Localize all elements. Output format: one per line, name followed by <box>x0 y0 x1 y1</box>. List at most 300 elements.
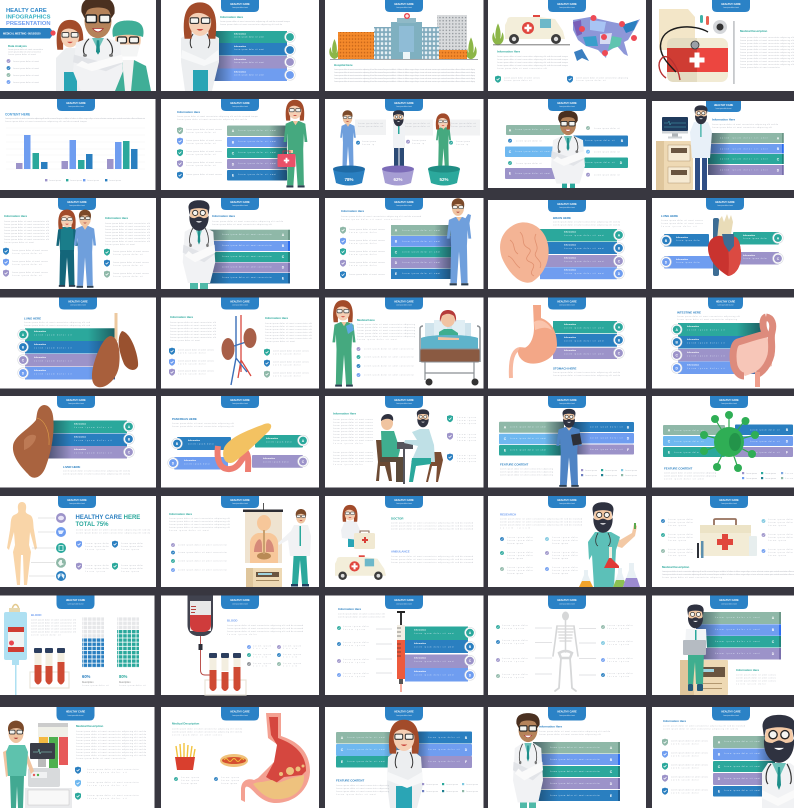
list items <box>171 543 227 572</box>
lettered bars: Lorem ipsum dolor sit amet <box>724 740 761 743</box>
lettered bars: B <box>395 240 398 244</box>
list items: Lorem ipsum dolor <box>507 566 533 569</box>
right bars: Lorem ipsum dolor sit <box>428 736 461 739</box>
text block: Lorem ipsum dolor sit amet consectetur adipiscing elit sed do <box>663 728 738 730</box>
list items: Lorem ipsum <box>283 662 301 665</box>
header tab <box>548 298 586 310</box>
podium: 78 percent: 78% <box>344 177 354 182</box>
panel: intestine <box>652 298 794 388</box>
left bars: Lorem ipsum dolor sit amet <box>515 128 551 131</box>
text block: right: Lorem ipsum dolor sit amet consectetur elit <box>105 228 150 231</box>
list items: Lorem ipsum dolor <box>552 566 578 569</box>
text block: Lorem ipsum <box>500 526 530 530</box>
illustration: anatomy chart <box>243 503 283 563</box>
list items: Lorem ipsum <box>552 557 568 560</box>
heading: right: Information Here <box>105 216 129 220</box>
list items: Lorem ipsum dolor sit amet consectetur <box>178 560 227 562</box>
check list: Lorem ipsum <box>457 433 476 436</box>
illustration: hospital building <box>329 13 478 60</box>
right bars: B <box>465 736 468 740</box>
text block: Lorem ipsum dolor sit amet consectetur adipiscing elit sed do <box>212 220 283 223</box>
illustration: patient in bed <box>420 310 480 386</box>
right bars: Lorem ipsum dolor sit <box>590 426 624 428</box>
panel: research <box>488 496 646 587</box>
info bars: D <box>618 272 621 276</box>
panel: stomach with bars <box>488 298 646 388</box>
lettered bars: Lorem ipsum dolor sit amet <box>402 261 441 264</box>
header tab <box>710 596 748 609</box>
text block: right: Lorem ipsum dolor sit amet consectetur elit <box>265 322 312 325</box>
text block <box>334 68 475 83</box>
header tab: Lorem ipsum dolor sit amet <box>723 6 739 9</box>
panel: medical machine <box>0 707 154 808</box>
text block: Lorem ipsum dolor sit amet consectetur elit <box>497 67 547 70</box>
panel: female doctor with six bars <box>325 707 484 808</box>
text block: Lorem ipsum dolor sit amet consectetur adipiscing elit sed do eiusmod tempor incididunt ut labore et dolore magna aliqua ut enim ad minim veniam quis nostrud exercitation ullamco laboris nisi ut aliquip <box>334 77 475 80</box>
list items: Lorem ipsum dolor <box>552 551 578 554</box>
check list: Lorem ipsum dolor <box>671 778 699 782</box>
header tab: HEALTHY CARE <box>66 399 86 402</box>
info bars: Information <box>184 459 197 462</box>
text block: Lorem ipsum dolor sit amet consec <box>736 674 776 676</box>
list items: Lorem ipsum dolor <box>507 554 533 557</box>
right bars: F <box>465 760 467 764</box>
check items: Lorem ip <box>412 142 424 145</box>
callout boxes: Lorem ipsum dolor sit <box>451 125 476 128</box>
text block <box>76 730 146 760</box>
info bars: Lorem ipsum dolor sit amet <box>564 234 605 237</box>
text block <box>172 728 242 736</box>
lettered bars: Lorem ipsum dolor sit amet <box>720 168 769 172</box>
text block: left: Lorem ipsum dolor sit amet consectetur elit <box>4 238 49 241</box>
right bars: B <box>621 139 624 143</box>
check list: Lorem ipsum dolor sit amet consec <box>671 752 708 754</box>
header tab: Lorem ipsum dolor sit amet <box>68 402 84 405</box>
header tab: Lorem ipsum dolor sit amet <box>232 502 248 505</box>
left bars: C <box>504 437 507 441</box>
list items with arrows: Lorem ipsum dolor <box>343 672 369 675</box>
text block: Lorem ipsum dolor sit amet consectetur adipiscing elit sed do eiusmod <box>227 627 303 630</box>
check list: left: Lorem ipsum dolor sit amet consec <box>178 348 214 352</box>
text block: Lorem ipsum dolor sit amet consectetur adipiscing elit <box>169 526 230 529</box>
text block: Lorem ipsum dolor sit amet consectetur adipiscing elit sed do eiusmod tempor <box>220 20 290 23</box>
lettered bars: C <box>282 255 285 259</box>
text block: Lorem ipsum dolor sit amet consectetur adipiscing elit sed do eiusmod tempor <box>177 115 258 118</box>
check items: Lorem ipsum <box>362 140 376 143</box>
pin items: Lorem ipsum <box>121 548 139 551</box>
text block: Lorem ipsum dolor sit amet consectetur adipiscing elit sed do <box>172 730 242 734</box>
info bars: A <box>777 236 780 240</box>
info bars: Information <box>414 642 427 645</box>
info bars: Information <box>74 436 87 438</box>
podium: 62 percent <box>382 166 414 186</box>
text block: Lorem ipsum dolor sit amet consec <box>736 680 776 682</box>
header tab: Lorem ipsum dolor sit amet <box>716 107 732 110</box>
lettered bars: Lorem ipsum dolor sit amet consectetur <box>550 770 600 773</box>
heading: LIVER HERE <box>63 465 80 469</box>
list items: Lorem ipsum <box>552 572 568 575</box>
panel: anatomy board and doctor <box>161 496 319 587</box>
info bars <box>553 321 624 359</box>
lettered bars <box>391 225 453 279</box>
lettered bars: E <box>718 790 721 794</box>
text block: Lorem ipsum dolor sit amet consec <box>333 460 373 463</box>
info bars: Information <box>687 364 700 366</box>
heading: Information Here <box>663 719 687 723</box>
info bars: Lorem ipsum dolor sit amet <box>564 247 605 250</box>
text block: right <box>265 322 312 343</box>
panel: skeleton <box>488 596 646 695</box>
lettered bars: B <box>282 244 285 248</box>
header tab: Lorem ipsum dolor sit amet <box>396 304 412 306</box>
info bars: Lorem ipsum dolor sit <box>34 360 73 362</box>
check list: left: Lorem ipsum dolor sit amet consec <box>178 370 214 372</box>
panel: doctor with six bars <box>488 396 646 488</box>
lettered bars: E <box>232 174 235 178</box>
text block: Lorem ipsum dolor sit amet consectetur adipiscing elit <box>740 60 794 63</box>
info bars: Lorem ipsum dolor sit <box>34 334 73 336</box>
legend: Lorem ipsum <box>426 790 438 793</box>
illustration: nurse <box>3 721 34 808</box>
text block: Lorem ipsum dolor sit amet consectetur adipiscing elit sed do <box>553 220 620 224</box>
pin items: Lorem ipsum dolor <box>85 545 109 548</box>
info bars: Information <box>564 268 577 272</box>
legend: Lorem ipsum <box>466 790 478 793</box>
header tab: HEALTHY CARE <box>394 499 414 502</box>
header tab: Lorem ipsum dolor sit amet <box>396 6 412 9</box>
check list: Lorem ipsum dolor sit amet consec <box>349 239 385 242</box>
text block <box>212 220 283 226</box>
header tab <box>385 198 423 210</box>
text block: Lorem ipsum dolor sit amet consectetur adipiscing elit sed do eiusmod tempor incididunt ut labore et dolore magna aliqua ut enim ad minim veniam quis nostrud exercitation ullamco laboris nisi ut aliquip <box>334 71 475 74</box>
lettered bars: A <box>718 740 721 744</box>
list items: Lorem ipsum <box>253 662 271 665</box>
illustration: skeleton <box>553 612 578 691</box>
lettered bars: A <box>610 746 613 750</box>
check list: right: Lorem ipsum dolor <box>273 374 301 378</box>
header tab: HEALTHY CARE <box>719 399 739 402</box>
header tab <box>56 707 94 720</box>
check list: right: Lorem ipsum dolor sit <box>113 275 143 278</box>
check list: Lorem ipsum dolor <box>671 766 699 770</box>
header tab: Lorem ipsum dolor sit amet <box>232 402 248 405</box>
lettered bars: B <box>718 752 721 756</box>
header tab: Lorem ipsum dolor sit amet <box>396 502 412 505</box>
check list: Lorem ipsum dolor sit amet consec <box>671 776 708 778</box>
illustration: ambulance <box>335 555 386 580</box>
text block: Lorem ipsum dolor sit amet consectetur elit <box>31 630 76 634</box>
text block: right: Lorem ipsum dolor sit amet consectetur elit <box>105 234 150 237</box>
list items with arrows: Lorem ipsum <box>343 644 365 647</box>
text block: Lorem ipsum dolor sit amet consectetur adipiscing elit sed do <box>553 371 620 374</box>
left bars: E <box>668 450 671 454</box>
list items: left: Lorem ipsum <box>668 539 686 542</box>
check list: Lorem ipsum dolor sit amet consec <box>349 261 385 264</box>
pin items: Lorem ipsum dolor <box>121 567 143 570</box>
text block <box>336 784 389 796</box>
legend: Lorem <box>785 472 793 475</box>
header tab <box>548 0 586 12</box>
title: PRESENTATION <box>6 21 51 27</box>
check items: Lorem ipsum dolor sit <box>516 140 542 142</box>
check list: Lorem ipsum dolor sit amet consectetur <box>364 374 414 376</box>
illustration: US map with pins <box>573 15 640 61</box>
info bars: Information <box>74 448 87 451</box>
info bars: Information <box>687 338 700 341</box>
list items: Lorem ipsum <box>507 572 523 575</box>
panel: blood bag and tubes <box>161 596 319 695</box>
text block: right: Lorem ipsum dolor sit amet consectetur elit <box>265 334 312 337</box>
list items: right: Lorem ipsum dolor <box>607 640 633 643</box>
illustration: body silhouette <box>7 502 37 585</box>
panel: virus <box>652 396 794 488</box>
header tab <box>221 396 259 408</box>
pin items <box>76 541 143 573</box>
header tab: HEALTHY CARE <box>721 710 741 714</box>
info bars: Information <box>676 236 689 239</box>
info bars: Information <box>564 336 577 339</box>
text block: Lorem ipsum dolor sit amet consectetur adipiscing elit <box>172 422 234 425</box>
text block: right: Lorem ipsum dolor sit amet <box>105 243 135 246</box>
text block: Lorem ipsum dolor sit <box>31 634 61 636</box>
text block: left: Lorem ipsum dolor sit amet consectetur elit <box>4 232 49 235</box>
legend: Lorem ipsum <box>765 472 776 475</box>
check list: Lorem ipsum dolor <box>349 253 377 256</box>
info bars: Lorem ipsum dolor sit <box>34 372 73 376</box>
header tab: Lorem ipsum dolor sit amet <box>396 602 412 606</box>
list items: right: Lorem ipsum dolor <box>607 672 633 675</box>
list items <box>500 536 578 575</box>
legend: Lorem ipsum <box>625 474 637 477</box>
right bars <box>735 424 793 457</box>
header tab: HEALTHY CARE <box>230 3 250 6</box>
info bars: A <box>618 233 621 237</box>
heading: ambulance: AMBULANCE <box>391 550 410 554</box>
info bars <box>405 626 475 682</box>
list items: Lorem ipsum dolor <box>552 554 578 557</box>
right bars: D <box>620 161 623 165</box>
waffle chart: 80 percent <box>117 617 139 667</box>
text block: Lorem ipsum dolor sit amet consectetur adipiscing elit sed do eiusmod tempor <box>497 55 568 58</box>
text block: ambulance: Lorem ipsum dolor sit amet consectetur adipiscing elit sed do eiusmod <box>391 561 473 564</box>
lettered bars: Lorem ipsum dolor sit amet <box>720 158 769 160</box>
check list: left: Lorem ipsum dolor sit amet consec <box>178 360 214 362</box>
left bars <box>505 125 564 179</box>
text block: Lorem ipsum dolor sit amet consectetur adipiscing elit <box>212 223 272 226</box>
header tab <box>706 198 744 210</box>
lettered bars: Lorem ipsum dolor sit amet <box>402 229 441 232</box>
lettered bars: Lorem ipsum dolor sit amet <box>402 250 441 254</box>
info bars: D <box>22 371 25 375</box>
check list: left: Lorem ipsum dolor sit <box>12 263 42 266</box>
illustration: stomach <box>511 305 557 378</box>
left bars: Lorem ipsum dolor sit amet <box>510 448 547 452</box>
lettered bars: Lorem ipsum dolor sit amet <box>238 162 277 165</box>
check items: Lorem ip <box>362 143 374 146</box>
header tab: HEALTHY CARE <box>557 399 577 402</box>
check list: Lorem ipsum dolor <box>349 264 377 267</box>
header tab: Lorem ipsum dolor sit amet <box>717 204 733 207</box>
lettered bars: Lorem ipsum dolor sit amet <box>724 765 761 768</box>
title: INFOGRAPHICS <box>6 14 51 20</box>
text block: Lorem ipsum dolor sit amet consectetur adipiscing elit sed do <box>76 751 146 754</box>
lettered bars: D <box>610 782 613 786</box>
illustration: machine <box>246 568 282 587</box>
text block: left: Lorem ipsum dolor sit amet consectetur elit <box>4 220 49 223</box>
header tab: Lorem ipsum dolor sit amet <box>396 714 412 717</box>
header tab: HEALTHY CARE <box>230 599 250 602</box>
header tab <box>385 496 423 508</box>
text block: Lorem ipsum dolor sit amet consectetur <box>341 218 401 221</box>
text block: Lorem ipsum dolor sit amet consectetur adipiscing elit sed do <box>76 730 146 733</box>
text block: Lorem ipsum dolor sit amet consectetur adipiscing elit <box>169 517 230 520</box>
check items: Lorem ipsum dolor sit <box>594 127 620 130</box>
chart legend <box>45 179 121 182</box>
list items: Lorem <box>283 647 297 650</box>
info bars <box>671 323 762 374</box>
panel: ambulance and map <box>488 0 646 91</box>
left bars: A <box>504 426 507 430</box>
lettered bars: Lorem ipsum dolor sit amet <box>402 272 441 275</box>
lettered bars <box>533 742 620 801</box>
check list <box>357 347 414 377</box>
check list: right: Lorem ipsum dolor sit amet consec <box>273 372 309 374</box>
illustration: three figures <box>340 110 451 169</box>
text block <box>220 20 290 26</box>
text block: Lorem ipsum dolor sit amet consectetur adipiscing elit sed do eiusmod <box>663 724 745 728</box>
left bars: Lorem ipsum dolor sit amet <box>347 748 386 751</box>
lettered bars: E <box>610 794 613 798</box>
list items: right: Lorem ipsum dolor <box>768 536 793 539</box>
lettered bars: B <box>610 758 613 762</box>
info bars: B <box>618 246 621 250</box>
list items: left: Lorem ipsum <box>668 524 686 527</box>
info bars: C <box>22 358 25 362</box>
illustration: stomach with contents <box>241 713 310 803</box>
text block <box>357 323 415 341</box>
text block: left: Lorem ipsum dolor sit amet <box>4 241 34 244</box>
text block: Lorem ipsum dolor sit amet consectetur adipiscing elit sed do <box>553 224 620 226</box>
left bars: Lorem ipsum dolor sit amet <box>515 150 551 153</box>
heading: Information Here <box>712 118 736 122</box>
info bars: Lorem ipsum dolor sit amet <box>234 74 265 76</box>
check list: left: Lorem ipsum dolor sit <box>12 274 42 277</box>
info bars: Lorem ipsum dolor sit amet <box>414 646 455 648</box>
list items: Lorem ipsum <box>283 653 301 656</box>
check list: right: Lorem ipsum dolor sit amet consec <box>273 360 309 364</box>
info bars: Lorem ipsum dolor sit <box>74 426 113 429</box>
info bars: Lorem ipsum dolor <box>743 258 767 260</box>
lettered bars: A <box>282 233 285 237</box>
header tab <box>548 596 586 609</box>
list items: left: Lorem ipsum dolor <box>668 551 693 554</box>
lettered bars <box>696 612 781 660</box>
list items: Lorem <box>253 647 267 650</box>
header tab: Lorem ipsum dolor sit amet <box>721 402 737 405</box>
illustration: test tubes in rack <box>30 648 69 688</box>
text block <box>5 117 146 123</box>
info bars: Lorem ipsum dolor sit amet <box>234 36 265 38</box>
right bars: Lorem ipsum dolor sit <box>585 161 616 164</box>
list items: Lorem ipsum <box>253 653 271 656</box>
header tab <box>58 496 96 508</box>
lettered bars: A <box>395 228 398 232</box>
list items: right: Lorem ipsum <box>607 660 629 663</box>
illustration: nurse with kit <box>278 100 307 188</box>
lettered bars: Lorem ipsum dolor sit amet <box>715 628 761 631</box>
panel: digestive stomach and food <box>161 707 319 808</box>
header tab: Lorem ipsum dolor sit amet <box>69 502 85 505</box>
header tab: HEALTHY CARE <box>230 102 250 105</box>
check list: Lorem ipsum <box>457 422 476 425</box>
check items: Lorem ipsum <box>456 140 470 143</box>
text block: Lorem ipsum dolor sit amet consectetur adipiscing elit sed do eiusmod tempor incididunt ut labore et dolore magna aliqua ut enim ad minim veniam quis nostrud exercitation ullamco laboris nisi ut aliquip <box>334 80 475 83</box>
info bars: Information <box>234 58 247 61</box>
panel: first aid kit <box>652 0 794 91</box>
date ribbon <box>0 28 56 38</box>
header tab: HEALTHY CARE <box>394 399 414 402</box>
left bars: A <box>509 128 512 132</box>
check list: Lorem ipsum dolor sit <box>87 797 127 800</box>
heading: LUNG HERE <box>24 316 41 320</box>
info bars: B <box>176 442 179 446</box>
icons with connectors <box>29 513 66 581</box>
left bars: E <box>509 172 512 176</box>
check list: Lorem ipsum dolor sit amet consec <box>349 228 385 231</box>
info bars: Lorem ipsum dolor <box>676 240 700 242</box>
illustration: curly doctor <box>513 713 543 808</box>
text block: Lorem ipsum dolor sit amet consectetur adipiscing elit sed do <box>712 123 778 126</box>
info bars: B <box>469 645 472 649</box>
list items: Lorem ipsum <box>181 782 197 785</box>
header tab: HEALTHY CARE <box>230 710 250 714</box>
info bars: Lorem ipsum dolor sit amet <box>414 632 455 635</box>
panel: medicine kit <box>652 496 794 587</box>
list items: right: Lorem ipsum dolor <box>607 657 633 660</box>
illustration: nurse <box>332 300 356 387</box>
list items: Lorem ipsum dolor sit amet <box>13 74 39 77</box>
left bars: Lorem ipsum dolor sit amet <box>515 172 551 175</box>
text block: Lorem ipsum dolor sit amet consectetur adipiscing elit sed do eiusmod tempor <box>497 61 568 64</box>
panel: hospital <box>325 0 484 91</box>
text block <box>227 624 303 636</box>
heading: right: Information Here <box>265 316 289 320</box>
legend <box>422 783 478 793</box>
text block <box>553 371 620 377</box>
text block: Lorem ipsum dolor sit amet consectetur adipiscing elit sed do <box>76 739 146 742</box>
text block: Lorem ipsum dolor sit amet consec <box>661 222 703 225</box>
lettered bars: Lorem ipsum dolor sit amet <box>724 789 761 792</box>
stat: 80 percent: Description <box>119 681 131 684</box>
text block <box>677 315 740 321</box>
text block: left: Lorem ipsum dolor sit amet consectetur elit <box>170 330 216 333</box>
info bars: B <box>128 437 131 441</box>
text block: right: Lorem ipsum dolor sit amet consectetur elit <box>105 240 150 243</box>
info bars: Lorem ipsum dolor sit amet <box>564 272 605 275</box>
list items with arrows: Lorem ipsum <box>343 675 365 678</box>
panel: doctor centre with left and right bars <box>488 99 646 188</box>
info bars: Lorem ipsum dolor <box>263 462 289 464</box>
illustration: scientist with flasks <box>579 502 640 587</box>
text block: Lorem ipsum dolor sit amet consec <box>333 433 373 436</box>
heading: data analysis: Data Analysis <box>8 44 27 48</box>
text block: Lorem ipsum dolor sit amet consec <box>333 418 373 421</box>
header tab <box>712 0 750 12</box>
info bars: Information <box>188 439 201 442</box>
text block: Lorem ipsum dolor sit amet consectetur adipiscing <box>357 323 415 326</box>
check list <box>177 127 222 179</box>
panel: nurse and patient in bed <box>325 298 484 388</box>
